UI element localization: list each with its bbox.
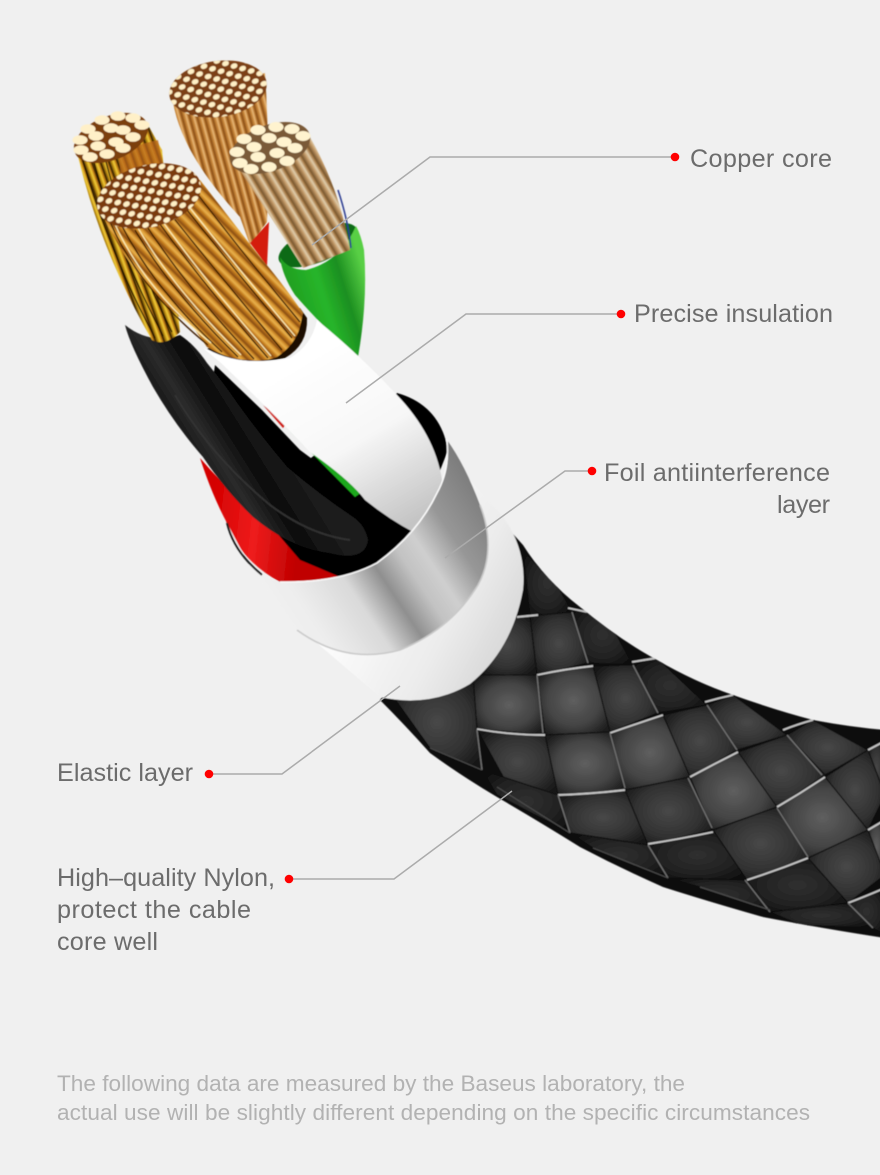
callout: elastic layer <box>57 686 400 787</box>
callout: high-quality nylon: core well <box>57 928 158 956</box>
callout: foil anti-interference layer <box>445 459 830 558</box>
green wire, top <box>273 214 365 357</box>
black wire <box>125 325 368 556</box>
callout: elastic layer: Elastic layer <box>57 759 193 787</box>
callout: precise insulation: Precise insulation <box>634 300 833 328</box>
callout: foil anti-interference layer: layer <box>777 491 830 519</box>
callout: foil anti-interference layer: Foil antiinterference <box>604 459 830 487</box>
red wire <box>200 458 360 582</box>
footnote <box>57 1071 810 1125</box>
footnote: actual use will be slightly different depending on the specific circumstances <box>57 1100 810 1125</box>
left copper bundle <box>67 103 180 342</box>
illustration: cross-section of braided cable <box>67 54 880 950</box>
inner cavity of the silver foil <box>226 393 448 592</box>
callout: high-quality nylon: High–quality Nylon, <box>57 864 275 892</box>
silver foil anti-interference band <box>227 440 488 654</box>
precise insulation: white wire <box>203 320 442 533</box>
footnote: The following data are measured by the Baseus laboratory, the <box>57 1071 685 1096</box>
callout: high-quality nylon <box>57 791 512 956</box>
elastic layer: white collar <box>296 480 524 700</box>
red wire, top fragment <box>250 222 269 266</box>
callout: copper core: Copper core <box>690 145 832 173</box>
right copper bundle <box>223 112 351 268</box>
braided nylon jacket <box>370 520 880 950</box>
front copper bundle <box>90 153 307 361</box>
callout: precise insulation <box>346 300 833 403</box>
callout: copper core <box>312 145 832 245</box>
black wire behind <box>207 365 415 577</box>
upper copper bundle (back) <box>166 54 270 245</box>
green and red fragments between wires <box>263 405 362 497</box>
callout: high-quality nylon: protect the cable <box>57 896 251 924</box>
